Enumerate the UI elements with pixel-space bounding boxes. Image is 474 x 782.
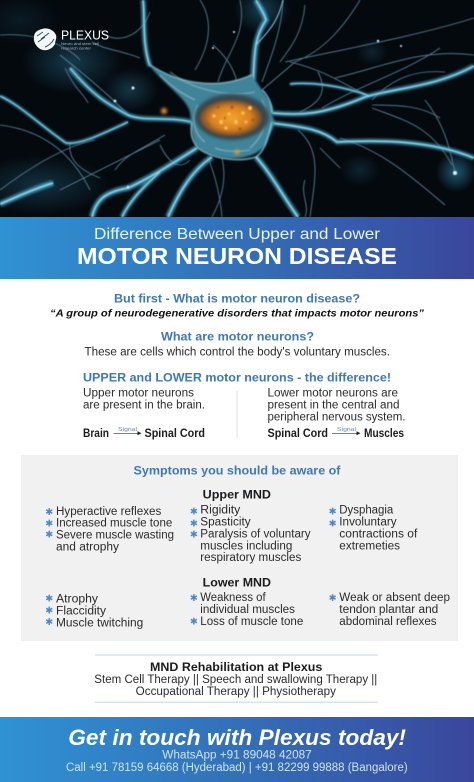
upper MND list 1 bbox=[45, 506, 174, 554]
panel: symptoms bbox=[21, 455, 458, 641]
upper MND list 1: ✱ bbox=[45, 530, 53, 541]
upper MND list 3: Dysphagia bbox=[339, 504, 394, 516]
footer contact banner: Get in touch with Plexus today! bbox=[68, 725, 406, 750]
upper motor neurons column: Upper motor neurons bbox=[83, 388, 194, 400]
heading: lower MND: Lower MND bbox=[203, 578, 271, 590]
section: MND rehabilitation: Occupational Therapy || Physiotherapy bbox=[136, 686, 336, 698]
upper MND list 1: Increased muscle tone bbox=[56, 518, 172, 530]
upper motor neurons column bbox=[83, 388, 205, 440]
upper motor neurons column: are present in the brain. bbox=[83, 399, 205, 411]
upper MND list 2: Rigidity bbox=[200, 504, 241, 516]
lower MND list 1: ✱ bbox=[45, 606, 53, 617]
bright dendrite core bbox=[0, 0, 474, 217]
main title: MOTOR NEURON DISEASE bbox=[77, 243, 397, 269]
nucleus texture bbox=[206, 105, 255, 131]
section: what is motor neuron disease bbox=[50, 292, 425, 320]
arrow: spinal cord to muscles: Signal bbox=[337, 427, 356, 433]
lower MND list 1: Muscle twitching bbox=[56, 617, 143, 629]
panel: symptoms: Symptoms you should be aware of bbox=[134, 463, 342, 477]
lower motor neurons column: peripheral nervous system. bbox=[268, 411, 406, 423]
upper MND list 3: extremeties bbox=[339, 540, 400, 552]
section: what are motor neurons: What are motor neurons? bbox=[161, 330, 314, 344]
lower MND list 2: ✱ bbox=[190, 616, 198, 627]
section: upper and lower difference bbox=[83, 371, 406, 440]
lower motor neurons column bbox=[268, 388, 406, 440]
lower MND list 3 bbox=[329, 592, 450, 628]
heading: upper MND: Upper MND bbox=[203, 489, 271, 501]
upper MND list 2: ✱ bbox=[190, 506, 198, 517]
section: MND rehabilitation bbox=[94, 655, 378, 702]
section: MND rehabilitation: Stem Cell Therapy || Speech and swallowing Therapy || bbox=[94, 674, 377, 686]
lower MND list 2: Loss of muscle tone bbox=[200, 616, 303, 628]
upper MND list 1: Hyperactive reflexes bbox=[56, 506, 162, 518]
upper MND list 1: and atrophy bbox=[56, 542, 119, 554]
lower motor neurons column: Spinal Cord bbox=[268, 428, 328, 440]
logo: Plexus: research center bbox=[61, 46, 92, 50]
upper MND list 2: Paralysis of voluntary bbox=[200, 528, 311, 540]
logo: Plexus bbox=[34, 28, 109, 50]
section: MND rehabilitation: MND Rehabilitation at Plexus bbox=[150, 662, 322, 674]
footer contact banner bbox=[0, 717, 474, 782]
hero image: neuron illustration bbox=[0, 0, 474, 217]
upper motor neurons column: Spinal Cord bbox=[144, 428, 205, 440]
lower MND list 2 bbox=[190, 592, 303, 628]
logo: Plexus: PLEXUS bbox=[61, 28, 109, 42]
section: upper and lower difference: UPPER and LOWER motor neurons - the difference! bbox=[83, 371, 391, 385]
lower MND list 3: abdominal reflexes bbox=[339, 616, 437, 628]
upper MND list 2: muscles including bbox=[200, 540, 292, 552]
glowing dots bbox=[114, 31, 457, 188]
arrow: brain to spinal cord: Signal bbox=[118, 427, 137, 433]
upper motor neurons column: Brain bbox=[83, 428, 109, 440]
section: what are motor neurons bbox=[84, 330, 390, 359]
lower MND list 1: ✱ bbox=[45, 594, 53, 605]
upper MND list 2: Spasticity bbox=[200, 516, 251, 528]
subtitle: Difference Between Upper and Lower bbox=[94, 226, 381, 243]
lower MND list 1 bbox=[45, 593, 143, 629]
upper MND list 3: contractions of bbox=[339, 528, 418, 540]
logo: Plexus: Neuro and stem cell bbox=[61, 42, 99, 46]
upper MND list 3: ✱ bbox=[329, 506, 337, 517]
upper MND list 1: ✱ bbox=[45, 519, 53, 530]
upper MND list 3: Involuntary bbox=[339, 516, 397, 528]
upper MND list 2: respiratory muscles bbox=[200, 552, 302, 564]
footer contact banner: Call +91 78159 64668 (Hyderabad) | +91 82299 99888 (Bangalore) bbox=[66, 762, 408, 774]
section: what is motor neuron disease: But first - What is motor neuron disease? bbox=[114, 292, 360, 306]
upper MND list 2: ✱ bbox=[190, 518, 198, 529]
upper MND list 2 bbox=[190, 504, 311, 564]
lower MND list 1: Flaccidity bbox=[56, 605, 106, 617]
orange glints bbox=[161, 108, 240, 154]
title banner bbox=[0, 217, 474, 279]
cell body bbox=[148, 64, 274, 158]
lower motor neurons column: present in the central and bbox=[268, 399, 400, 411]
lower MND list 2: individual muscles bbox=[200, 604, 295, 616]
thick dendrite glow bbox=[0, 0, 474, 217]
lower MND list 2: ✱ bbox=[190, 593, 198, 604]
lower MND list 3: ✱ bbox=[329, 593, 337, 604]
upper MND list 3 bbox=[329, 504, 418, 552]
lower MND list 1: ✱ bbox=[45, 617, 53, 628]
upper MND list 1: Severe muscle wasting bbox=[56, 529, 174, 541]
upper MND list 2: ✱ bbox=[190, 530, 198, 541]
footer contact banner: WhatsApp +91 89048 42087 bbox=[162, 750, 312, 762]
logo icon: brain in hand bbox=[34, 28, 56, 50]
lower MND list 3: tendon plantar and bbox=[339, 604, 438, 616]
lower motor neurons column: Lower motor neurons are bbox=[268, 388, 398, 400]
lower motor neurons column: Muscles bbox=[364, 428, 404, 440]
lower MND list 1: Atrophy bbox=[56, 593, 98, 605]
upper MND list 3: ✱ bbox=[329, 518, 337, 529]
thin axon branches bbox=[0, 0, 474, 217]
upper MND list 1: ✱ bbox=[45, 507, 53, 518]
nucleus bbox=[195, 94, 269, 140]
lower MND list 3: Weak or absent deep bbox=[339, 592, 450, 604]
lower MND list 2: Weakness of bbox=[200, 592, 266, 604]
section: what are motor neurons: These are cells which control the body's voluntary muscles. bbox=[84, 347, 390, 359]
section: what is motor neuron disease: “A group of neurodegenerative disorders that impacts motor neurons” bbox=[50, 308, 425, 320]
